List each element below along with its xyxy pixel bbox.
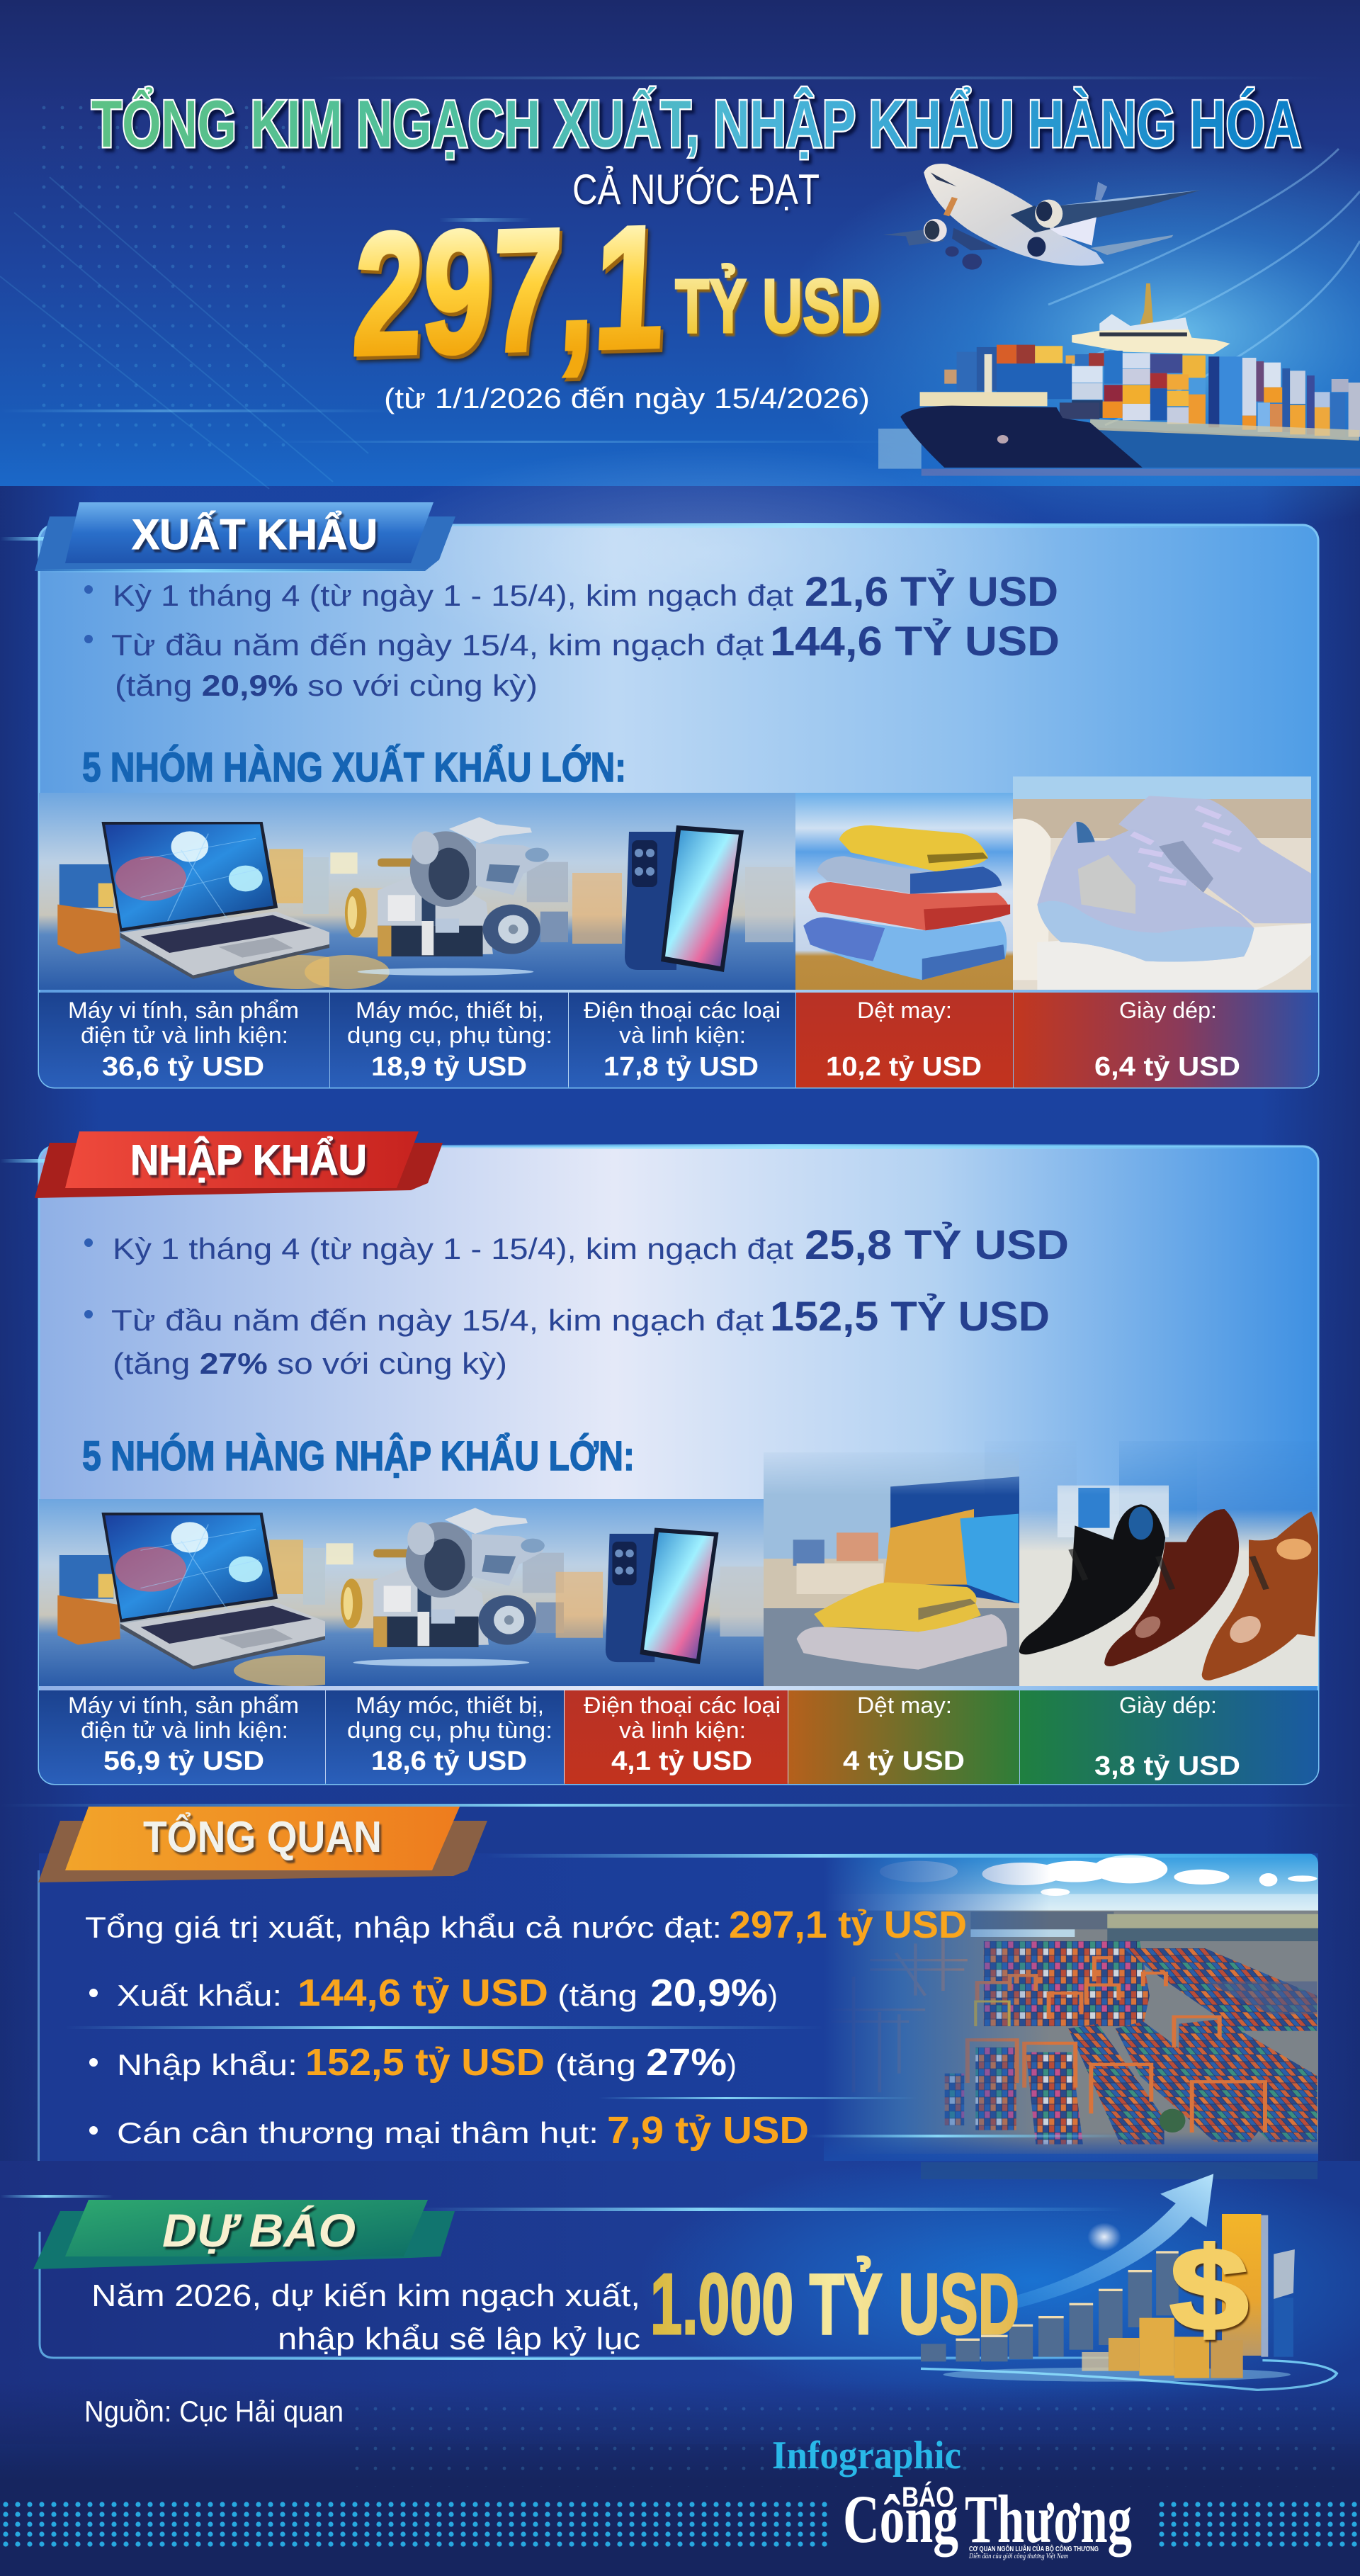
image: textiles export — [795, 793, 1013, 990]
footer background — [0, 2380, 1360, 2576]
logo: Báo Công Thương: Diễn đàn của giới công thương Việt Nam — [968, 2553, 1068, 2560]
overview balance line: Cán cân thương mại thâm hụt: — [117, 2116, 599, 2150]
cell: computers: 56,9 tỷ USD — [103, 1746, 264, 1776]
overview balance line — [89, 2109, 809, 2152]
unit: TỶ USD — [675, 263, 880, 349]
bullet list: import: Kỳ 1 tháng 4 (từ ngày 1 - 15/4), kim ngạch đạt — [113, 1232, 793, 1265]
cell: machinery: dụng cụ, phụ tùng: — [347, 1717, 552, 1743]
cell: machinery: Máy móc, thiết bị, — [356, 998, 544, 1023]
cell: machinery: Máy móc, thiết bị, — [356, 1693, 544, 1718]
overview total line — [85, 1904, 967, 1946]
bullet list: export: 21,6 TỶ USD — [805, 569, 1058, 615]
heading: top 5 imports: 5 NHÓM HÀNG NHẬP KHẨU LỚN: — [82, 1433, 635, 1479]
cell: computers: điện tử và linh kiện: — [81, 1022, 288, 1048]
bullet list: export: (tăng 20,9% so với cùng kỳ) — [115, 669, 538, 702]
panel: forecast background — [0, 2147, 1360, 2444]
cell: footwear: 6,4 tỷ USD — [1094, 1052, 1240, 1082]
cell: computers — [39, 1690, 325, 1784]
forecast text: nhập khẩu sẽ lập kỷ lục — [278, 2322, 640, 2356]
cell: textiles — [788, 1690, 1019, 1784]
footer — [0, 2380, 1360, 2576]
bullet list: import: 152,5 TỶ USD — [770, 1294, 1050, 1340]
banner: overview: TỔNG QUAN — [143, 1812, 382, 1862]
bullet list: import: Từ đầu năm đến ngày 15/4, kim ngạch đạt — [111, 1304, 764, 1337]
banner: overview — [38, 1807, 487, 1882]
cell: phones: và linh kiện: — [619, 1022, 746, 1048]
banner: forecast — [33, 2200, 455, 2269]
cell: textiles: 10,2 tỷ USD — [826, 1052, 982, 1082]
banner: export: XUẤT KHẨU — [132, 511, 378, 558]
image: laptop import — [39, 1499, 361, 1686]
panel: overview background — [0, 1804, 1360, 2161]
overview export line: (tăng — [557, 1979, 638, 2012]
label row: import categories — [39, 1690, 1318, 1784]
bullet list: import — [84, 1222, 1069, 1380]
overview import line: Nhập khẩu: — [117, 2048, 298, 2081]
image: machinery import — [325, 1499, 566, 1686]
illustration: container ship — [878, 283, 1360, 476]
image: textiles import — [764, 1452, 1058, 1686]
big number: 297,1 — [350, 189, 669, 391]
overview balance line: 7,9 tỷ USD — [607, 2109, 809, 2152]
cell: textiles — [796, 993, 1013, 1088]
image: laptop export — [39, 793, 361, 990]
section: overview — [0, 1804, 1360, 2168]
dot band right — [1154, 2502, 1360, 2551]
heading: top 5 exports: 5 NHÓM HÀNG XUẤT KHẨU LỚN: — [82, 745, 626, 791]
logo: Báo Công Thương: Công — [843, 2481, 958, 2557]
cell: phones — [569, 993, 795, 1088]
illustration: growth chart with dollar — [921, 2174, 1337, 2390]
banner: import — [35, 1131, 443, 1198]
panel: import background — [0, 1144, 1318, 1784]
image: shoes export — [1013, 776, 1312, 992]
overview import line — [89, 2041, 737, 2084]
panel: export background — [0, 446, 1318, 1088]
date range: (từ 1/1/2026 đến ngày 15/4/2026) — [384, 383, 870, 414]
section: forecast — [0, 2147, 1360, 2444]
logo: Báo Công Thương: Thương — [965, 2481, 1132, 2557]
overview import line: 152,5 tỷ USD — [305, 2041, 545, 2084]
overview import line: ) — [727, 2048, 737, 2081]
banner: export — [35, 502, 455, 572]
overview export line: 144,6 tỷ USD — [298, 1972, 548, 2014]
panel glow lines — [65, 1854, 1318, 2137]
overview import line: 27% — [646, 2041, 727, 2084]
bullet list: import: (tăng 27% so với cùng kỳ) — [113, 1347, 507, 1380]
cell: computers: Máy vi tính, sản phẩm — [68, 998, 299, 1023]
header panel — [0, 0, 1360, 538]
cell: computers: 36,6 tỷ USD — [102, 1052, 264, 1082]
cell: computers — [39, 993, 329, 1088]
label row: export categories — [39, 993, 1318, 1088]
bullet list: export — [84, 569, 1060, 702]
section: export — [0, 446, 1318, 1088]
forecast value: 1.000 TỶ USD — [650, 2256, 1019, 2352]
banner: import: NHẬP KHẨU — [130, 1136, 367, 1184]
logo: Báo Công Thương — [843, 2481, 1132, 2560]
bullet list: export: Từ đầu năm đến ngày 15/4, kim ngạch đạt — [111, 628, 764, 662]
cell: textiles: Dệt may: — [857, 1693, 952, 1718]
image: phone import — [556, 1499, 766, 1686]
cell: footwear: Giày dép: — [1119, 1693, 1217, 1718]
cell: machinery — [326, 1690, 564, 1784]
cell: textiles: 4 tỷ USD — [843, 1746, 965, 1776]
forecast text: Năm 2026, dự kiến kim ngạch xuất, — [91, 2278, 640, 2313]
cell: footwear — [1014, 993, 1318, 1088]
cell: machinery: 18,6 tỷ USD — [371, 1746, 527, 1776]
dollar sign: $ — [1170, 2224, 1248, 2354]
bullet list: export: 144,6 TỶ USD — [770, 618, 1060, 665]
section: import — [0, 1131, 1319, 1784]
cell: footwear: Giày dép: — [1119, 998, 1217, 1023]
overview total line: Tổng giá trị xuất, nhập khẩu cả nước đạt: — [85, 1911, 722, 1944]
image: phone export — [568, 793, 795, 990]
image: machinery export — [305, 793, 570, 990]
cell: footwear: 3,8 tỷ USD — [1094, 1751, 1240, 1781]
dot band left — [0, 2502, 832, 2551]
banner: forecast: DỰ BÁO — [162, 2204, 356, 2256]
cell: textiles: Dệt may: — [857, 998, 952, 1023]
cell: phones: Điện thoại các loại — [584, 998, 781, 1023]
cell: phones — [565, 1690, 788, 1784]
logo: Báo Công Thương: BÁO — [902, 2481, 954, 2513]
cell: computers: Máy vi tính, sản phẩm — [68, 1693, 299, 1718]
source: Nguồn: Cục Hải quan — [84, 2395, 344, 2428]
cell: machinery — [330, 993, 568, 1088]
cell: phones: và linh kiện: — [619, 1717, 746, 1743]
overview export line — [89, 1972, 778, 2014]
bullet list: import: 25,8 TỶ USD — [805, 1222, 1069, 1268]
bullet list: export: Kỳ 1 tháng 4 (từ ngày 1 - 15/4), kim ngạch đạt — [113, 579, 793, 612]
overview export line: 20,9% — [650, 1972, 768, 2014]
overview total line: 297,1 tỷ USD — [729, 1904, 967, 1946]
cell: machinery: dụng cụ, phụ tùng: — [347, 1022, 552, 1048]
overview import line: (tăng — [555, 2048, 636, 2081]
subtitle: CẢ NƯỚC ĐẠT — [572, 166, 820, 213]
cell: phones: 17,8 tỷ USD — [604, 1052, 759, 1082]
overview export line: Xuất khẩu: — [117, 1979, 282, 2012]
image: shoes import — [1019, 1486, 1319, 1686]
cell: computers: điện tử và linh kiện: — [81, 1717, 288, 1743]
cell: machinery: 18,9 tỷ USD — [371, 1052, 527, 1082]
logo: Báo Công Thương: CƠ QUAN NGÔN LUẬN CỦA BỘ CÔNG THƯƠNG — [969, 2544, 1099, 2553]
image: container port — [815, 1853, 1325, 2168]
cell: phones: 4,1 tỷ USD — [611, 1746, 752, 1776]
infographic label: Infographic — [772, 2434, 961, 2478]
forecast text — [91, 2278, 640, 2356]
cell: phones: Điện thoại các loại — [584, 1693, 781, 1718]
cell: footwear — [1020, 1690, 1318, 1784]
icon: airplane — [883, 164, 1201, 270]
overview export line: ) — [768, 1979, 778, 2012]
